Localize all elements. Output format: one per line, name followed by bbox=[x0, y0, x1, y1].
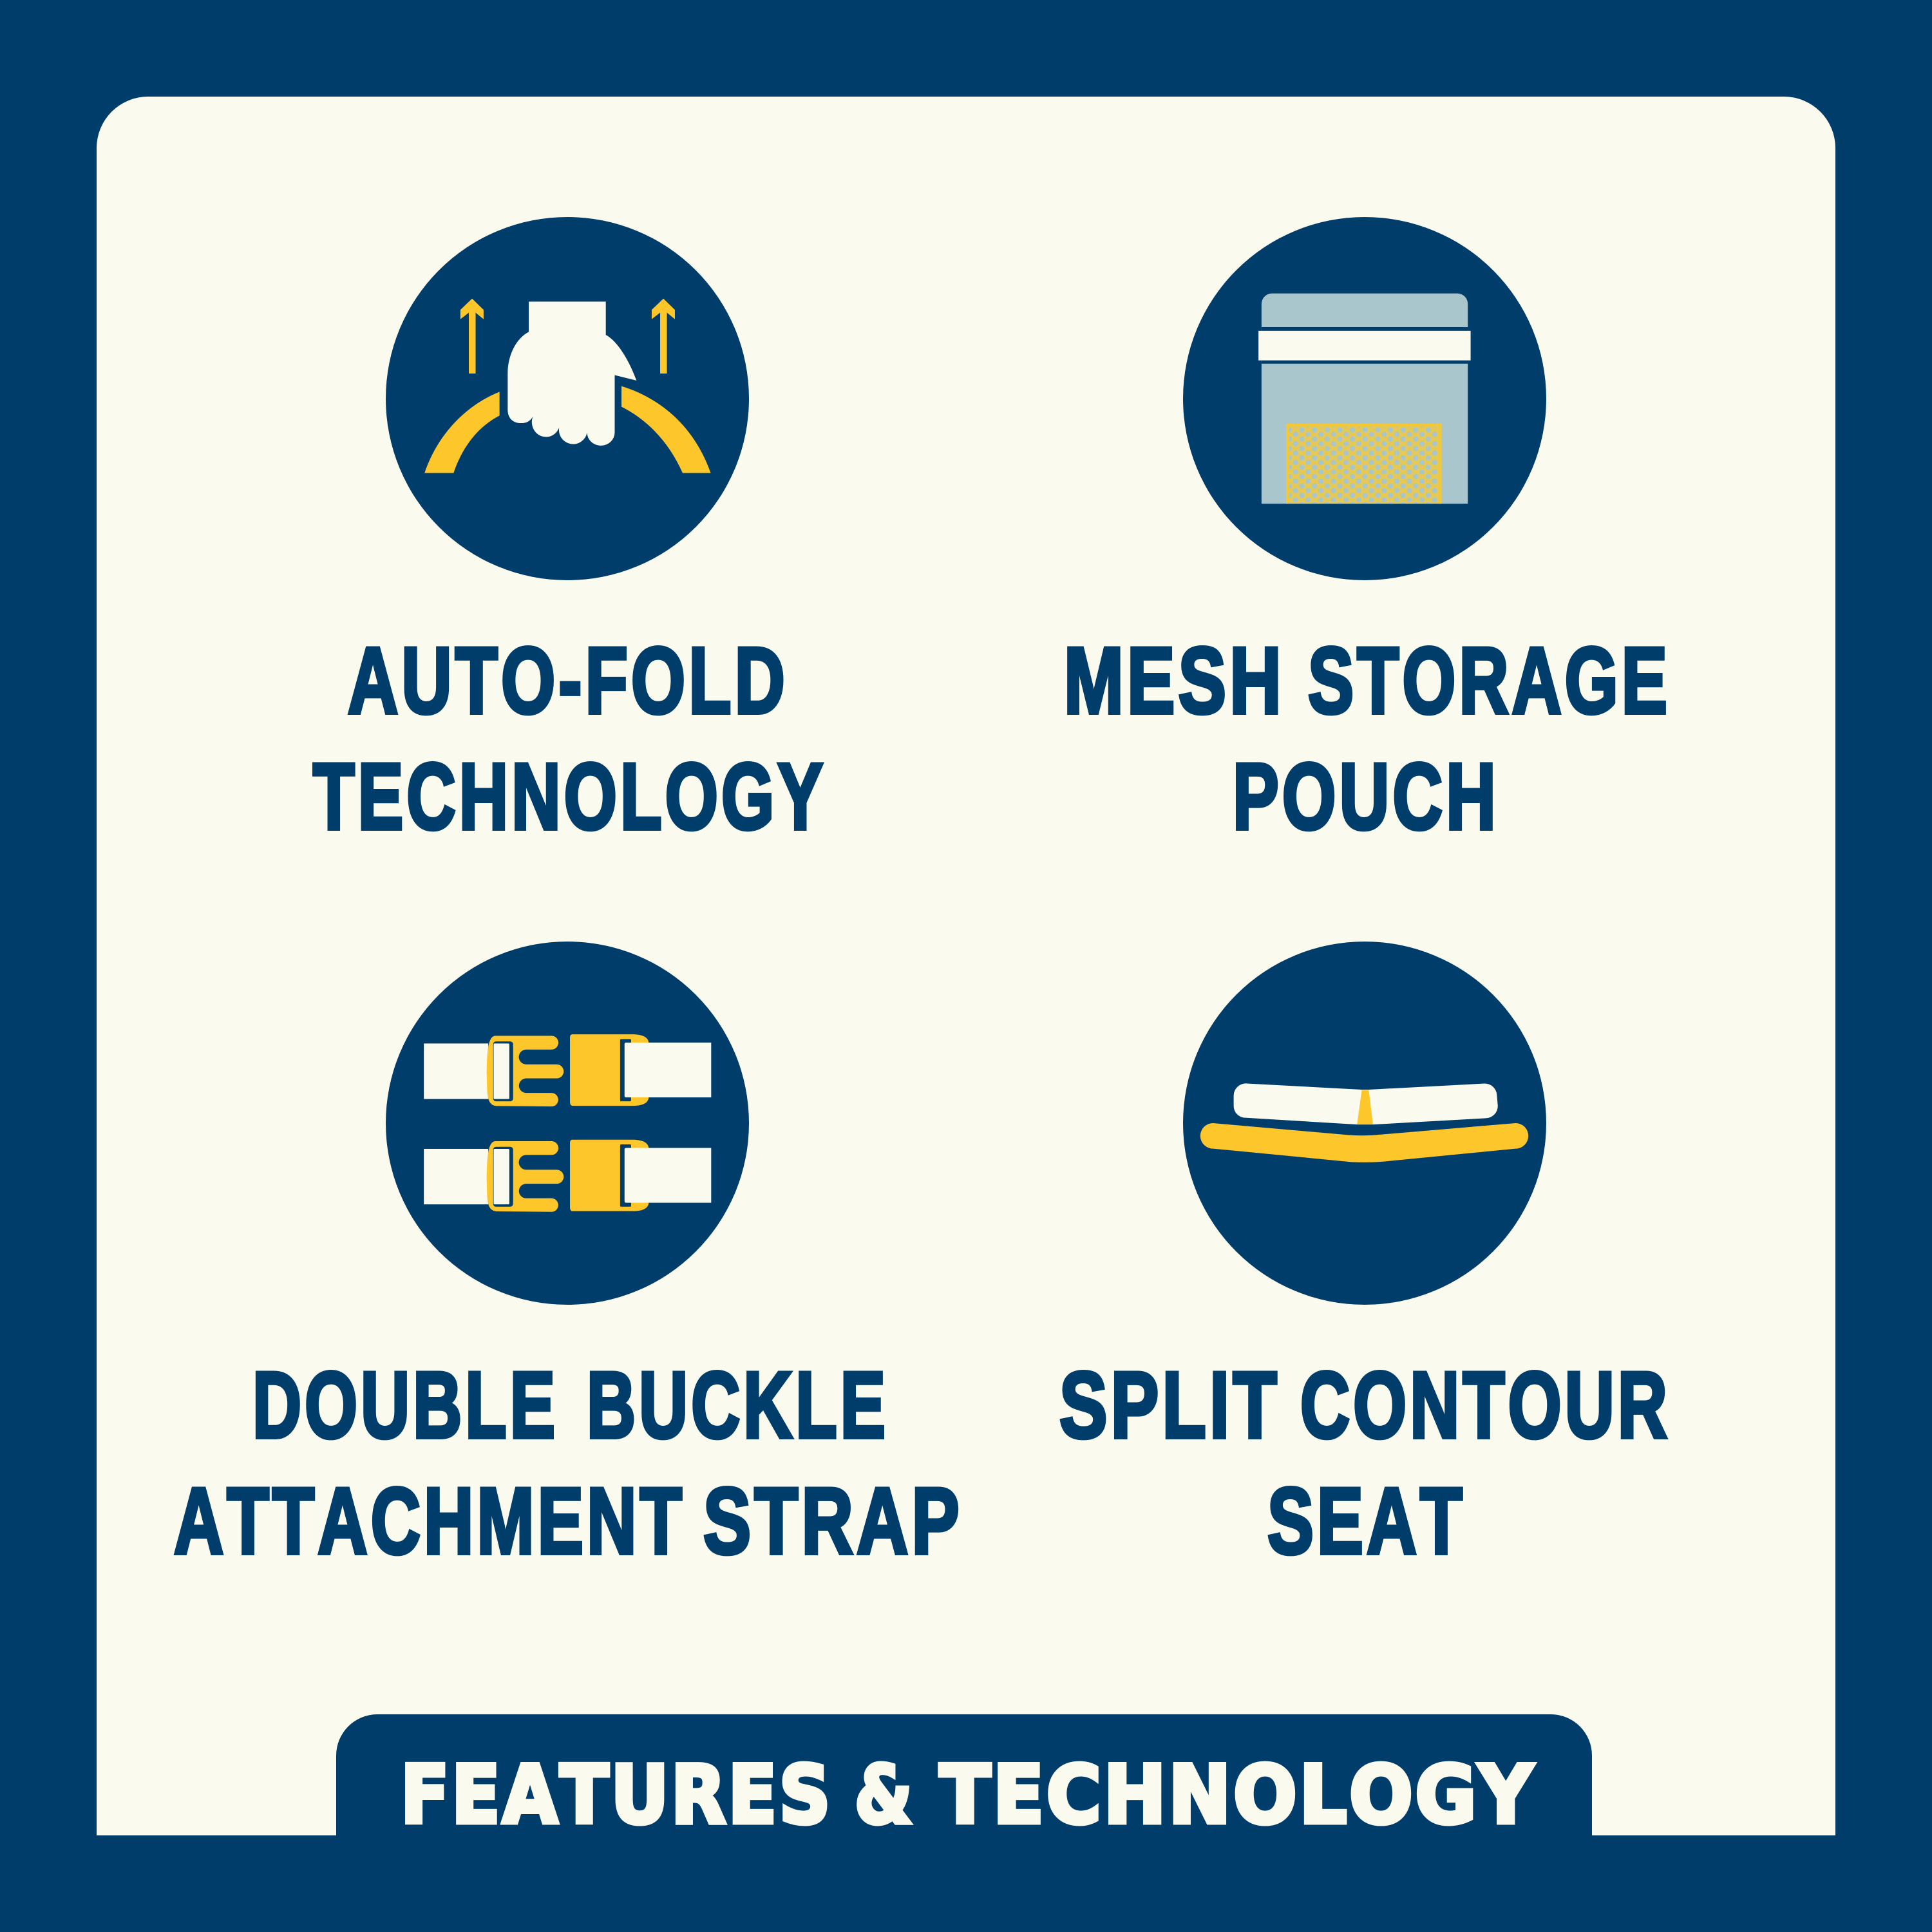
label: mesh storage pouch: POUCH bbox=[1233, 744, 1499, 849]
label: auto-fold technology: TECHNOLOGY bbox=[313, 744, 826, 849]
label: split contour seat bbox=[1059, 1352, 1671, 1573]
title: features and technology: TECHNOLOGY bbox=[940, 1749, 1535, 1842]
label: double buckle attachment strap: ATTACHMENT bbox=[174, 1468, 685, 1573]
label: mesh storage pouch: STORAGE bbox=[1308, 628, 1671, 733]
label: double buckle attachment strap: DOUBLE bbox=[252, 1352, 558, 1457]
title: features and technology: & bbox=[855, 1749, 914, 1842]
label: auto-fold technology bbox=[313, 628, 826, 849]
feature: double buckle attachment strap bbox=[174, 942, 963, 1573]
label: double buckle attachment strap: STRAP bbox=[703, 1468, 963, 1573]
label: split contour seat: SEAT bbox=[1267, 1468, 1466, 1573]
feature: split contour seat bbox=[1059, 942, 1671, 1573]
icon: hand lifting seat bbox=[386, 217, 749, 580]
label: double buckle attachment strap bbox=[174, 1352, 963, 1573]
label: auto-fold technology: AUTO-FOLD bbox=[348, 628, 788, 733]
footer title tab bbox=[336, 1714, 1592, 1842]
feature: auto-fold technology bbox=[313, 217, 826, 849]
label: mesh storage pouch: MESH bbox=[1064, 628, 1285, 733]
icon: seat pouch with mesh pocket bbox=[1183, 217, 1546, 580]
title: features and technology bbox=[401, 1749, 1535, 1842]
label: split contour seat: CONTOUR bbox=[1300, 1352, 1671, 1457]
label: double buckle attachment strap: BUCKLE bbox=[587, 1352, 889, 1457]
icon: two buckled straps bbox=[386, 942, 749, 1305]
icon: split seat cushion on curved base bbox=[1183, 942, 1546, 1305]
label: mesh storage pouch bbox=[1064, 628, 1671, 849]
label: split contour seat: SPLIT bbox=[1059, 1352, 1280, 1457]
title: features and technology: FEATURES bbox=[401, 1749, 833, 1842]
feature: mesh storage pouch bbox=[1064, 217, 1671, 849]
